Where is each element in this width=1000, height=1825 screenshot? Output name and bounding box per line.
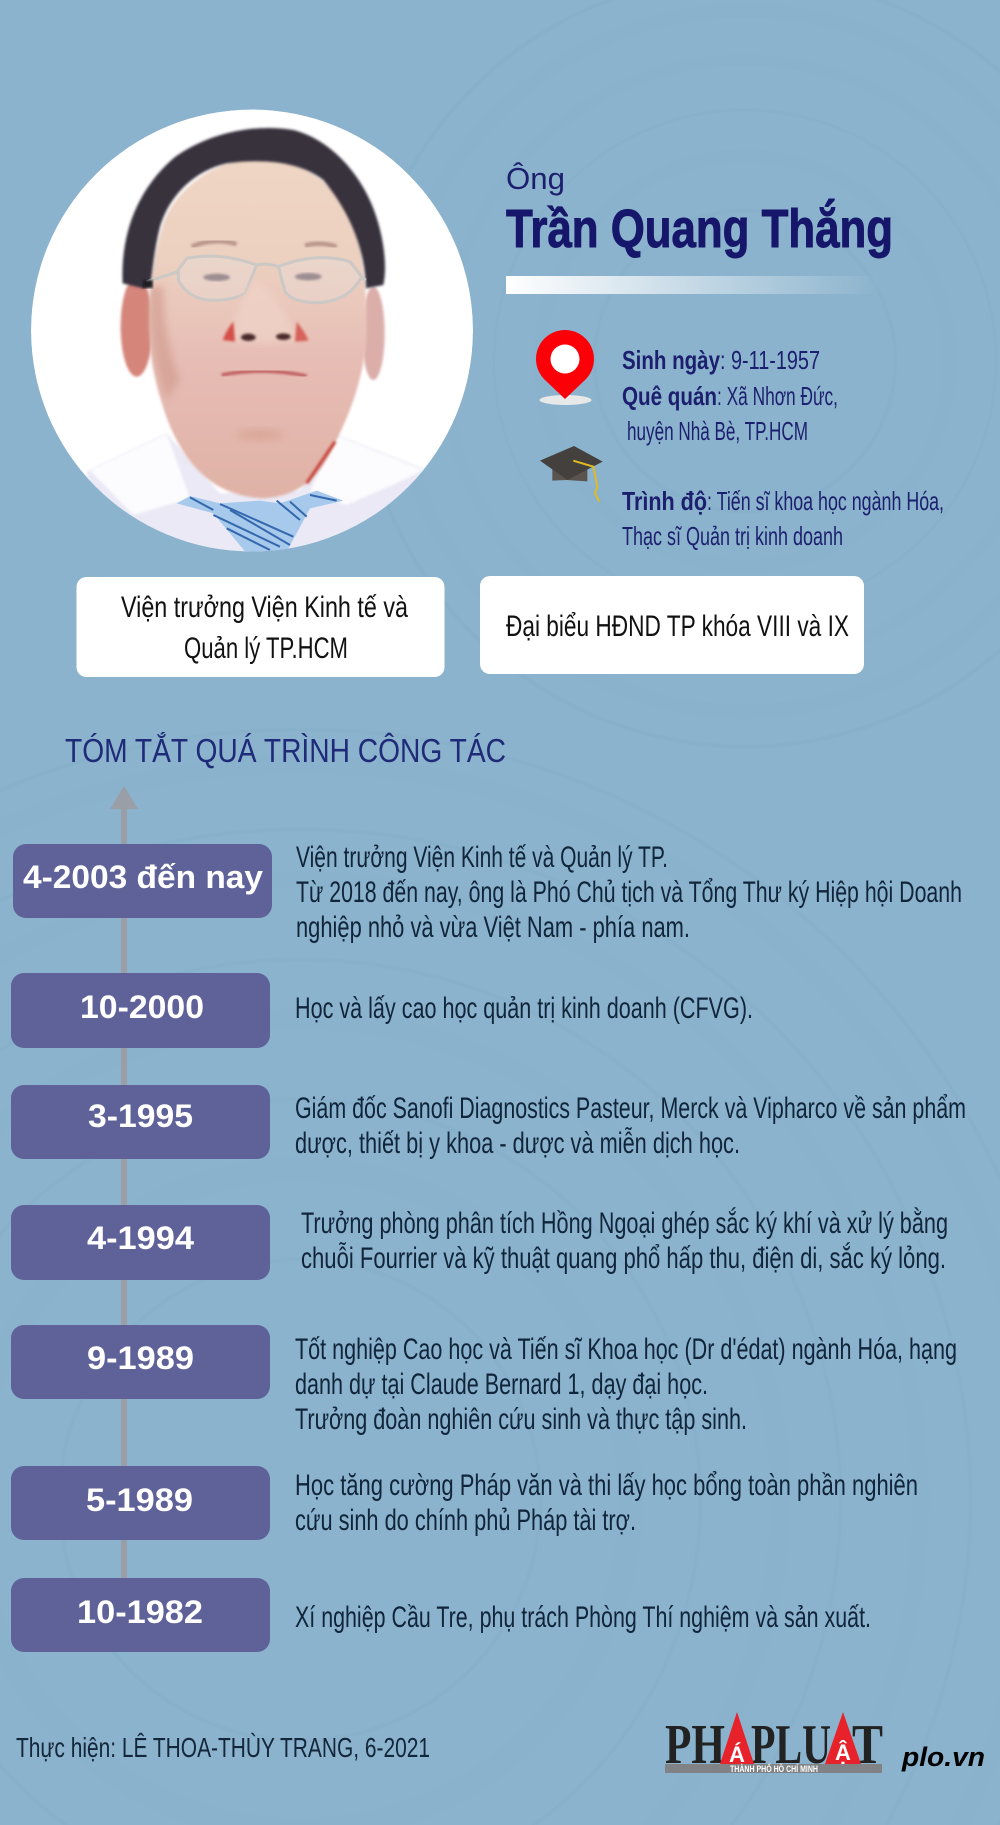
position card: institute director: Viện trưởng Viện Kinh tế và <box>121 591 408 624</box>
position card: institute director <box>76 577 444 677</box>
timeline entry: 3-1995: dược, thiết bị y khoa - dược và miễn dịch học. <box>295 1127 740 1160</box>
logo: Pháp Luật: Ậ <box>835 1740 851 1765</box>
timeline entry: 10-2000: Học và lấy cao học quản trị kinh doanh (CFVG). <box>295 992 753 1025</box>
timeline entry: 4-2003: Viện trưởng Viện Kinh tế và Quản lý TP. <box>296 841 668 874</box>
personal details text: Sinh ngày <box>622 345 720 375</box>
person name heading: Ông <box>506 161 565 196</box>
gradient divider bar <box>506 276 880 294</box>
timeline entry: 5-1989 <box>11 1466 918 1540</box>
tie <box>177 491 343 553</box>
position card: council delegate: Đại biểu HĐND TP khóa VIII và IX <box>506 610 849 643</box>
timeline entry: 4-2003 <box>13 841 962 944</box>
portrait photo <box>31 110 473 560</box>
personal details text: Quê quán <box>622 381 717 411</box>
timeline entry: 4-1994 <box>11 1205 948 1280</box>
education text <box>622 486 944 551</box>
person name heading <box>506 161 893 259</box>
personal details text: : 9-11-1957 <box>720 345 820 375</box>
face shading <box>149 287 180 400</box>
timeline entry: 10-2000: 10-2000 <box>80 989 204 1025</box>
position card: institute director: Quản lý TP.HCM <box>184 632 348 665</box>
timeline entry: 10-2000 <box>11 973 753 1048</box>
logo: Pháp Luật: PH <box>665 1714 725 1776</box>
position card: council delegate <box>480 576 864 674</box>
timeline entry: 9-1989: Trưởng đoàn nghiên cứu sinh và thực tập sinh. <box>295 1403 747 1436</box>
ears <box>121 277 385 380</box>
eyebrows <box>192 241 337 247</box>
icon: location pin <box>536 330 594 405</box>
shirt <box>86 435 424 552</box>
glasses <box>178 256 362 303</box>
timeline entry: 9-1989: danh dự tại Claude Bernard 1, dạy đại học. <box>295 1368 708 1401</box>
personal details text: huyện Nhà Bè, TP.HCM <box>627 416 808 446</box>
person name heading: Trần Quang Thắng <box>506 199 893 259</box>
logo: Pháp Luật: PLU <box>751 1714 831 1776</box>
timeline heading: TÓM TẮT QUÁ TRÌNH CÔNG TÁC <box>65 732 506 769</box>
logo: Pháp Luật: T <box>852 1714 883 1776</box>
eyes <box>203 273 322 281</box>
logo: Pháp Luật <box>665 1712 883 1776</box>
timeline entry: 4-2003: 4-2003 đến nay <box>23 859 263 895</box>
logo: Pháp Luật: Á <box>729 1742 745 1767</box>
personal details text: : Xã Nhơn Đức, <box>717 381 838 411</box>
credit line: Thực hiện: LÊ THOA-THÙY TRANG, 6-2021 <box>16 1732 430 1763</box>
logo: Pháp Luật: THÀNH PHỐ HỒ CHÍ MINH <box>730 1763 818 1774</box>
mouth <box>222 371 307 376</box>
nose <box>235 284 293 342</box>
timeline entry: 5-1989: 5-1989 <box>86 1482 193 1518</box>
hair <box>122 128 385 288</box>
timeline entry: 4-2003: nghiệp nhỏ và vừa Việt Nam - phía nam. <box>296 911 690 944</box>
timeline entry: 5-1989: cứu sinh do chính phủ Pháp tài trợ. <box>295 1504 636 1537</box>
icon: graduation cap <box>540 446 603 502</box>
arrow: timeline axis <box>110 786 138 1580</box>
education text: Trình độ <box>622 486 707 516</box>
shirt collars <box>90 433 423 515</box>
timeline entry: 9-1989 <box>11 1325 957 1436</box>
timeline entry: 10-1982: 10-1982 <box>77 1594 203 1630</box>
timeline entry: 4-1994: 4-1994 <box>87 1220 194 1256</box>
timeline entry: 10-1982 <box>11 1578 871 1652</box>
education text: Thạc sĩ Quản trị kinh doanh <box>622 521 843 551</box>
timeline entry: 3-1995 <box>11 1085 966 1160</box>
website label: plo.vn <box>901 1742 985 1772</box>
face <box>149 158 367 498</box>
timeline entry: 3-1995: 3-1995 <box>88 1098 193 1134</box>
timeline entry: 9-1989: 9-1989 <box>87 1340 194 1376</box>
personal details text <box>622 345 838 446</box>
